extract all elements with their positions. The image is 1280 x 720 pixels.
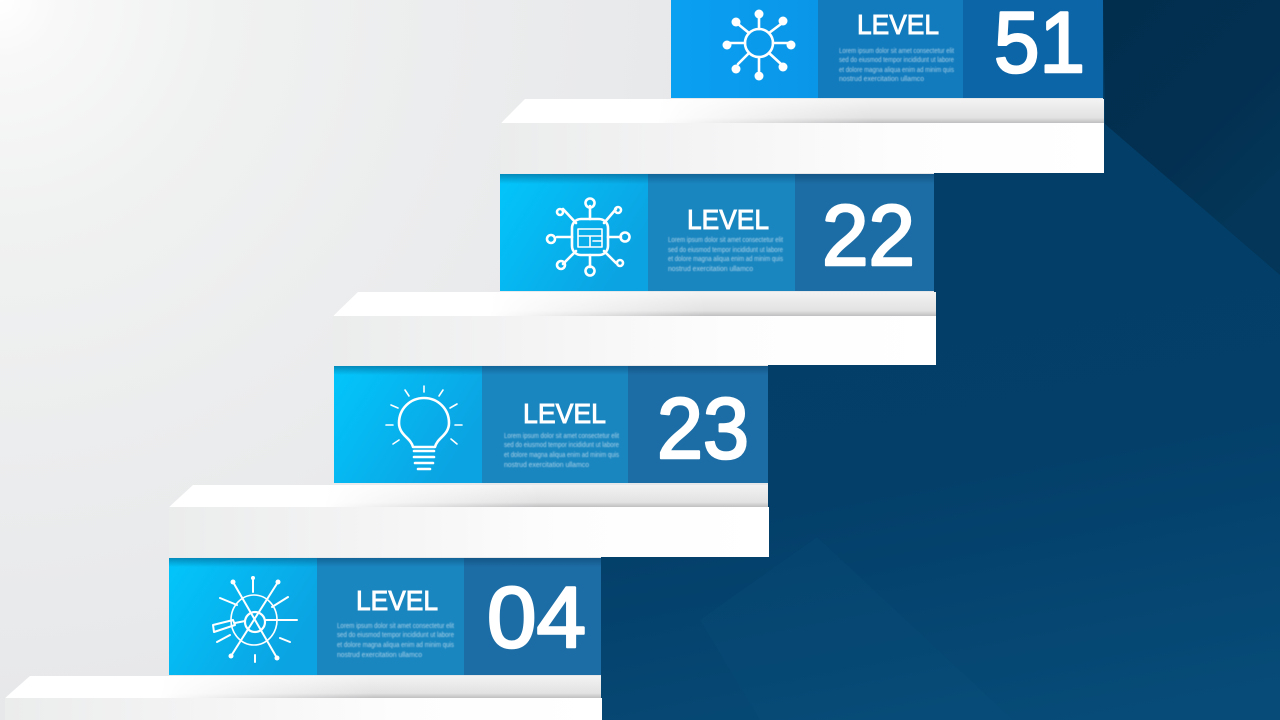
- icon: web network: [213, 576, 297, 662]
- text block: description: Lorem ipsum dolor sit amet consectetur elit: [668, 237, 783, 244]
- number: 04: 04: [487, 570, 586, 666]
- text block: description: et dolore magna aliqua enim ad minim quis: [504, 452, 619, 459]
- panel: level 51 card: [671, 0, 1103, 98]
- text block: description: nostrud exercitation ullamco: [839, 76, 924, 83]
- panel: level 04 card: [169, 558, 601, 675]
- text block: description: [839, 48, 954, 83]
- panel: level 23 card: [334, 366, 768, 483]
- label: LEVEL: LEVEL: [356, 585, 438, 616]
- text block: description: Lorem ipsum dolor sit amet consectetur elit: [504, 433, 619, 440]
- panel: level 22 card: [500, 174, 934, 291]
- number: 23: 23: [657, 381, 749, 477]
- text block: description: et dolore magna aliqua enim ad minim quis: [668, 256, 783, 263]
- icon: light bulb: [386, 386, 462, 469]
- label: LEVEL: LEVEL: [687, 204, 769, 235]
- dark navy stepped background: [601, 0, 1280, 720]
- text block: description: et dolore magna aliqua enim ad minim quis: [839, 67, 954, 74]
- text block: description: nostrud exercitation ullamco: [668, 266, 753, 273]
- step 3: level 23: [169, 366, 769, 557]
- step 4: level 04: [5, 558, 602, 720]
- text block: description: Lorem ipsum dolor sit amet consectetur elit: [337, 623, 454, 630]
- icon: network hub: [722, 10, 796, 80]
- text block: description: sed do eiusmod tempor incididunt ut labore: [668, 247, 783, 254]
- icon: chip network: [547, 198, 630, 276]
- text block: description: [668, 237, 783, 273]
- shelf 3: [169, 485, 769, 557]
- text block: description: et dolore magna aliqua enim ad minim quis: [337, 642, 454, 649]
- shelf 4: [5, 676, 602, 720]
- text block: description: sed do eiusmod tempor incididunt ut labore: [504, 442, 619, 449]
- number: 22: 22: [822, 188, 915, 284]
- shelf 1: [501, 99, 1104, 173]
- text block: description: nostrud exercitation ullamco: [337, 652, 422, 659]
- text block: description: Lorem ipsum dolor sit amet consectetur elit: [839, 48, 954, 55]
- text block: description: sed do eiusmod tempor incididunt ut labore: [337, 632, 454, 639]
- step 2: level 22: [333, 174, 936, 365]
- text block: description: [337, 623, 454, 659]
- text block: description: sed do eiusmod tempor incididunt ut labore: [839, 57, 954, 64]
- text block: description: [504, 433, 619, 469]
- shelf 2: [333, 292, 936, 365]
- label: LEVEL: LEVEL: [523, 398, 606, 429]
- step 1: level 51: [501, 0, 1104, 173]
- text block: description: nostrud exercitation ullamco: [504, 462, 589, 469]
- label: LEVEL: LEVEL: [857, 9, 939, 40]
